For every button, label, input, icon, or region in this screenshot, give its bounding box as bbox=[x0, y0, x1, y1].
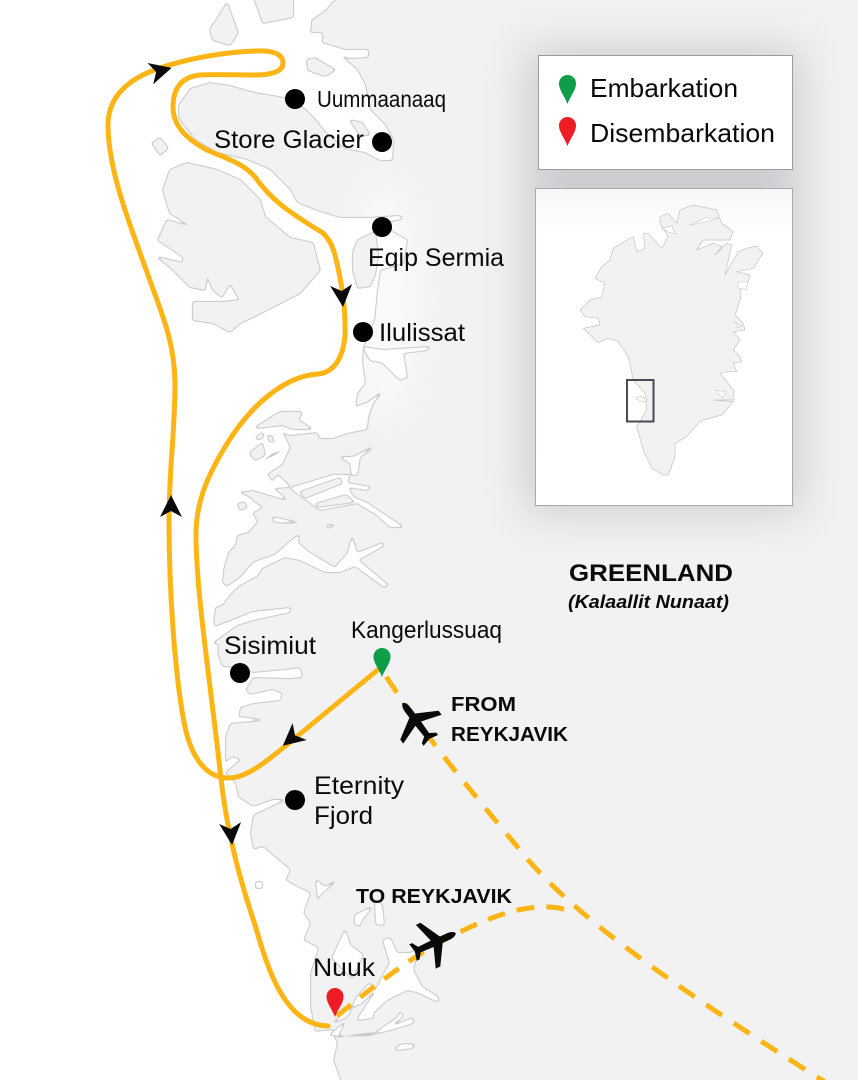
route arrowheads bbox=[147, 57, 354, 846]
country label: GREENLAND bbox=[569, 560, 733, 587]
place labels: Fjord bbox=[314, 802, 373, 830]
place labels: Eternity bbox=[314, 772, 405, 800]
place labels: Eqip Sermia bbox=[368, 244, 504, 272]
icon: disembarkation pin bbox=[559, 117, 576, 146]
islands in the north bbox=[152, 0, 378, 332]
icon: plane from Reykjavik bbox=[383, 688, 450, 755]
flight labels: FROM bbox=[451, 694, 516, 716]
place labels: Kangerlussuaq bbox=[351, 617, 502, 644]
flight route from Reykjavik bbox=[382, 670, 825, 1080]
native name: (Kalaallit Nunaat) bbox=[568, 592, 729, 612]
place labels: Sisimiut bbox=[224, 632, 316, 660]
icon: Nuuk pin bbox=[326, 988, 344, 1017]
flight labels: REYKJAVIK bbox=[451, 724, 569, 746]
flight labels: TO REYKJAVIK bbox=[356, 886, 513, 908]
place labels: Uummaanaaq bbox=[317, 86, 446, 112]
location dots bbox=[230, 89, 392, 810]
disembarkation label: Disembarkation bbox=[590, 118, 775, 148]
place labels: Nuuk bbox=[313, 954, 376, 982]
place labels bbox=[214, 86, 504, 982]
place labels: Ilulissat bbox=[379, 319, 465, 347]
sea and west coastline bbox=[0, 0, 407, 1080]
cruise route bbox=[108, 51, 380, 1026]
flight route to Reykjavik bbox=[337, 907, 570, 1016]
legend panel bbox=[538, 56, 792, 170]
embarkation label: Embarkation bbox=[590, 73, 738, 103]
icon: Kangerlussuaq pin bbox=[374, 648, 390, 677]
study area rectangle bbox=[627, 380, 654, 422]
inset fjords bbox=[636, 218, 748, 402]
fjords near Ilulissat and further south bbox=[256, 347, 438, 1050]
inset map panel bbox=[536, 188, 792, 506]
icon: embarkation pin bbox=[559, 75, 576, 104]
flight labels bbox=[356, 694, 569, 908]
Greenland outline bbox=[580, 205, 763, 475]
small islands in the central coast bbox=[238, 412, 354, 510]
icon: plane to Reykjavik bbox=[403, 911, 466, 974]
country label bbox=[568, 560, 733, 612]
place labels: Store Glacier bbox=[214, 126, 364, 154]
